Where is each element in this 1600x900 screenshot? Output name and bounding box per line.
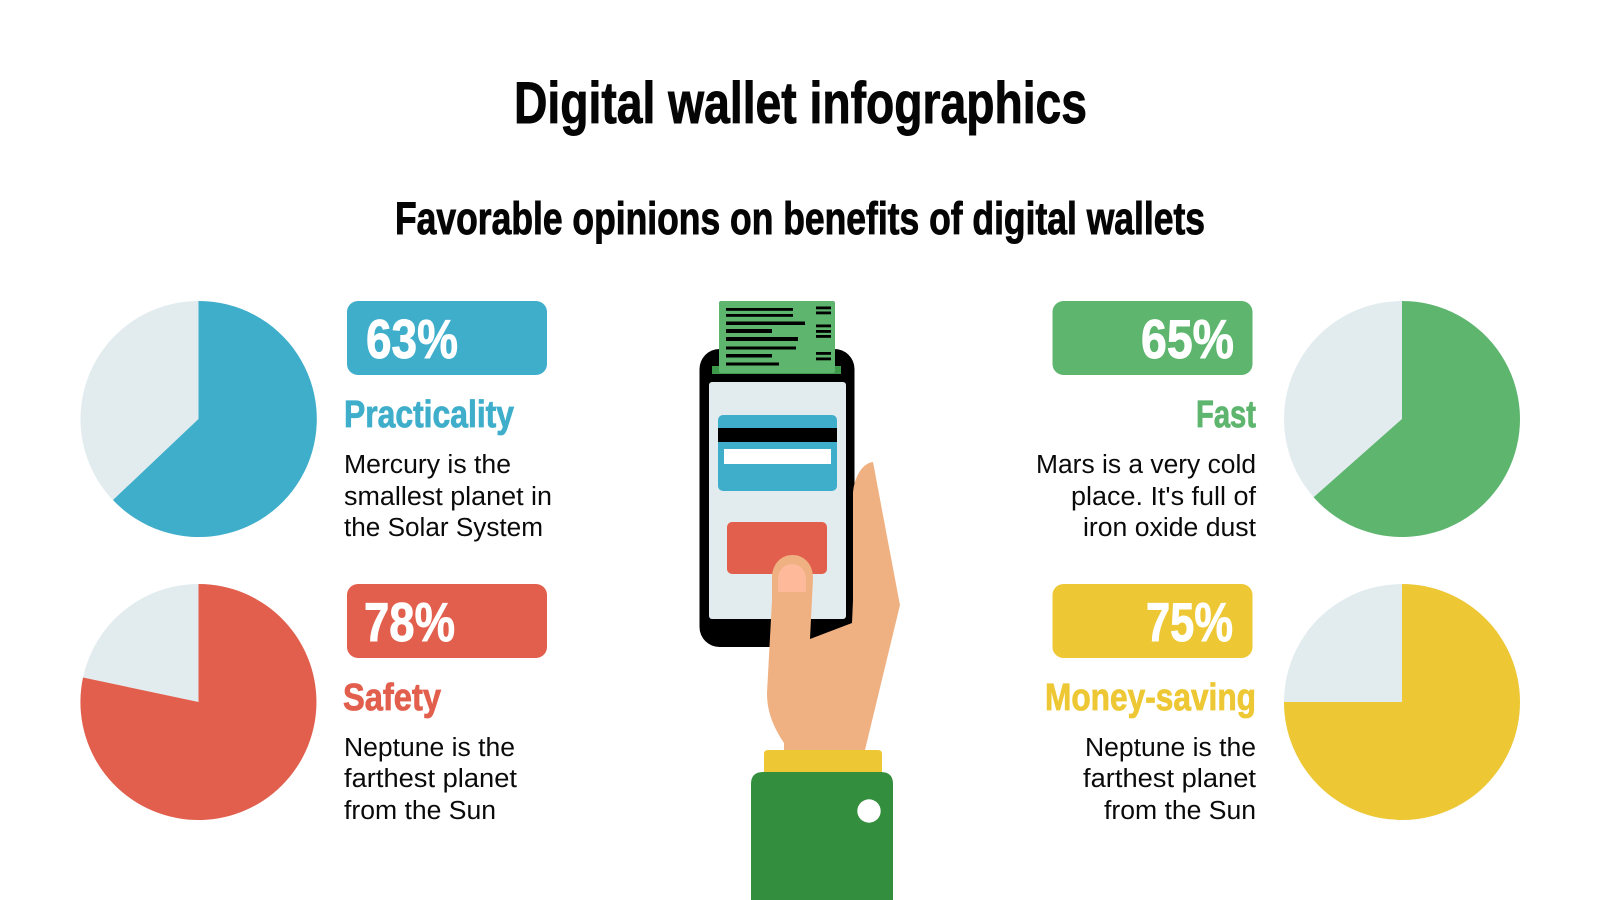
- illustration: hand holding phone: [700, 301, 900, 900]
- title: Digital wallet infographics: [514, 71, 1087, 136]
- sleeve: [751, 772, 893, 900]
- description: practicality: the Solar System: [344, 514, 543, 542]
- heading: Safety: Safety: [343, 677, 441, 719]
- description: practicality: smallest planet in: [344, 483, 552, 511]
- pie chart: safety 78%: [80, 584, 316, 820]
- description: fast: iron oxide dust: [1083, 514, 1256, 542]
- badge: 63%: 63%: [366, 308, 458, 370]
- panel: practicality: [80, 301, 552, 542]
- description: money-saving: Neptune is the: [1085, 734, 1256, 762]
- panel: safety: [80, 584, 547, 825]
- shirt cuff: [764, 750, 882, 773]
- description: safety: Neptune is the: [344, 734, 515, 762]
- icon: bank card: [718, 415, 837, 491]
- badge: 65%: 65%: [1141, 308, 1234, 370]
- heading: Money-saving: Money-saving: [1045, 677, 1256, 719]
- badge: 78%: [347, 584, 547, 658]
- description: safety: [344, 734, 517, 825]
- icon: phone: [700, 349, 854, 647]
- badge: 75%: [1052, 584, 1252, 658]
- description: safety: from the Sun: [344, 797, 496, 825]
- pie chart: practicality 63%: [80, 301, 317, 537]
- pie chart: money-saving 75%: [1284, 584, 1520, 820]
- pie chart: fast 65%: [1284, 301, 1520, 537]
- heading: Fast: Fast: [1196, 394, 1256, 436]
- badge: 65%: [1052, 301, 1252, 375]
- panel: money-saving: [1045, 584, 1520, 825]
- heading: Practicality: Practicality: [344, 394, 514, 436]
- description: practicality: [344, 451, 552, 542]
- badge: 63%: [347, 301, 547, 375]
- pay button: [727, 522, 827, 574]
- description: fast: [1036, 451, 1257, 542]
- panel: fast: [1036, 301, 1520, 542]
- badge: 78%: 78%: [364, 591, 455, 653]
- description: money-saving: farthest planet: [1083, 765, 1256, 793]
- description: money-saving: from the Sun: [1104, 797, 1256, 825]
- description: fast: Mars is a very cold: [1036, 451, 1256, 479]
- badge: 75%: 75%: [1146, 591, 1233, 653]
- description: practicality: Mercury is the: [344, 451, 511, 479]
- sleeve button: [857, 799, 881, 823]
- description: money-saving: [1083, 734, 1256, 825]
- subtitle: Favorable opinions on benefits of digital wallets: [395, 193, 1205, 244]
- description: safety: farthest planet: [344, 765, 517, 793]
- icon: receipt: [712, 301, 841, 374]
- description: fast: place. It's full of: [1071, 483, 1257, 511]
- icon: hand: [767, 462, 900, 750]
